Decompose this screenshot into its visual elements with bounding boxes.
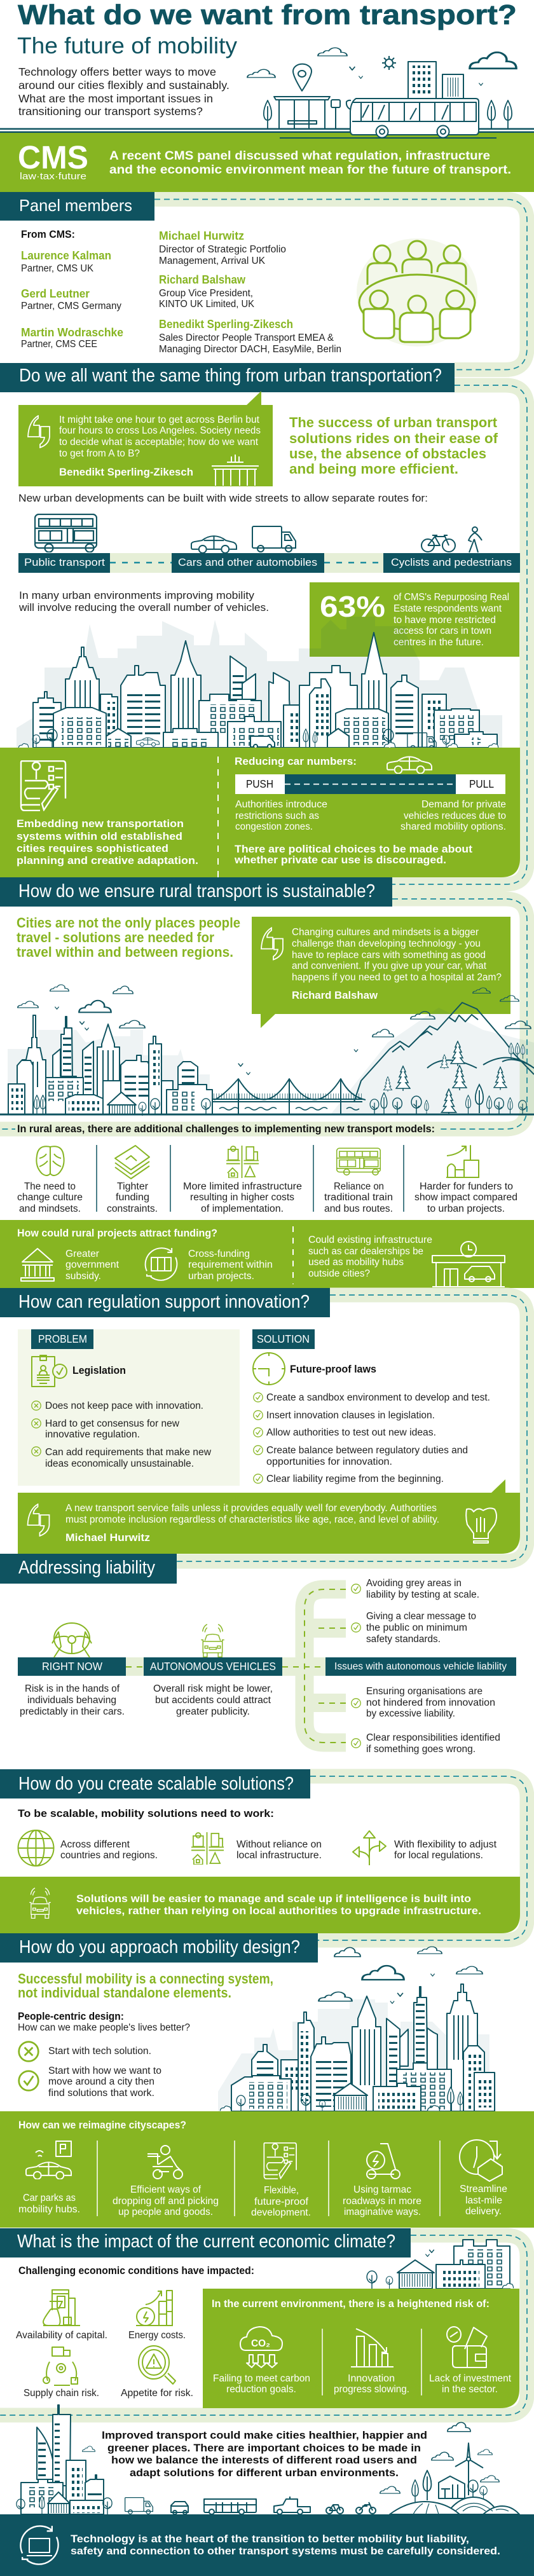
icon: car park bbox=[26, 2141, 71, 2179]
text: embedding transport bbox=[17, 818, 198, 867]
scalable criteria row: countries and regions. bbox=[60, 1850, 158, 1861]
panel: problem bbox=[18, 1329, 240, 1486]
closing message: greener places. There are important choices to be made in bbox=[107, 2442, 421, 2454]
panel: intelligence in vehicles bbox=[0, 1877, 520, 1933]
text: embedding transport: Embedding new transportation bbox=[17, 818, 184, 830]
icon: delivery clock bbox=[460, 2140, 502, 2181]
scalable criteria row bbox=[18, 1830, 497, 1866]
key message: urban solutions: and being more efficient. bbox=[289, 461, 458, 477]
icon: city grid bbox=[226, 1146, 259, 1178]
liability issues list: not hindered from innovation bbox=[366, 1697, 495, 1708]
challenges row: funding bbox=[116, 1192, 149, 1203]
quote: Benedikt Sperling-Zikesch: Benedikt Sperling-Zikesch bbox=[59, 466, 193, 478]
panel list: CMS speakers: Martin Wodraschke bbox=[21, 326, 123, 339]
stat: 63 percent: to have more restricted bbox=[394, 615, 496, 626]
intro paragraph bbox=[18, 65, 229, 118]
icon: CO2 cloud: CO₂ bbox=[251, 2338, 270, 2349]
text: right now: Risk is in the hands of bbox=[25, 1683, 120, 1694]
text: cross-funding: Cross-funding bbox=[188, 1249, 250, 1259]
challenges row: traditional train bbox=[324, 1192, 393, 1203]
CMS logo: law·tax·future bbox=[20, 171, 86, 182]
key message: rural: travel - solutions are needed for bbox=[17, 929, 214, 945]
text: push: congestion zones. bbox=[235, 821, 313, 832]
challenges row: Tighter bbox=[117, 1181, 148, 1192]
key message: urban solutions: solutions rides on their ease of bbox=[289, 430, 498, 446]
text: pull: shared mobility options. bbox=[400, 821, 506, 832]
closing message: Improved transport could make cities healthier, happier and bbox=[102, 2429, 427, 2441]
icon: electric scooter bbox=[367, 2144, 400, 2179]
panel: heightened risk: Innovation bbox=[348, 2373, 395, 2384]
text: pull: Demand for private bbox=[421, 799, 506, 810]
illustration: small city bbox=[367, 2240, 514, 2289]
icon: people round a table bbox=[357, 238, 477, 346]
heading: panel members bbox=[0, 192, 154, 221]
challenges row: of implementation. bbox=[201, 1203, 284, 1214]
icon: bus bbox=[337, 1148, 380, 1175]
text: push bbox=[235, 799, 327, 832]
challenges row: and mindsets. bbox=[19, 1203, 81, 1214]
text: autonomous vehicles: but accidents could attract bbox=[155, 1695, 271, 1706]
liability issues list: Ensuring organisations are bbox=[366, 1686, 483, 1697]
panel: rural funding: How could rural projects attract funding? bbox=[17, 1227, 217, 1239]
panel: reimagine cityscapes: Using tarmac bbox=[353, 2184, 411, 2195]
panel: problem: Does not keep pace with innovation. bbox=[45, 1401, 203, 1411]
quote: Richard Balshaw: Richard Balshaw bbox=[292, 989, 378, 1001]
icon: brain bbox=[36, 1146, 64, 1175]
heading: regulation bbox=[0, 1288, 330, 1317]
footer panel bbox=[0, 2514, 534, 2576]
panel: problem: innovative regulation. bbox=[45, 1429, 140, 1440]
icon: city grid bbox=[191, 1832, 224, 1865]
panel: reimagine cityscapes: development. bbox=[251, 2207, 311, 2218]
panel: reimagine cityscapes: Streamline bbox=[460, 2184, 507, 2195]
text: pull bbox=[400, 799, 506, 832]
heading: urban transportation: Do we all want the same thing from urban transportation? bbox=[19, 366, 442, 386]
subtitle: The future of mobility bbox=[17, 32, 237, 58]
icon: energy costs bbox=[136, 2291, 173, 2326]
panel list: CMS speakers bbox=[21, 228, 123, 350]
icon: falling chart bbox=[351, 2329, 394, 2367]
panel list: guest speakers: Sales Director People Transport EMEA & bbox=[159, 332, 334, 343]
icon: globe bbox=[18, 1830, 53, 1866]
panel: solution: Insert innovation clauses in legislation. bbox=[266, 1410, 435, 1421]
quote: Richard Balshaw: happens if you need to get to a hospital at 2am? bbox=[292, 972, 502, 983]
quote: Richard Balshaw: and convenient. If you give up your car, what bbox=[292, 961, 487, 971]
quote: Benedikt Sperling-Zikesch: to decide what is acceptable; how do we want bbox=[59, 437, 259, 448]
text: people-centric design: move around a city then bbox=[48, 2076, 154, 2087]
panel list: guest speakers: Group Vice President, bbox=[159, 288, 253, 299]
text: right now: individuals behaving bbox=[27, 1695, 116, 1706]
push pull bar bbox=[235, 774, 505, 794]
quote: Michael Hurwitz: Michael Hurwitz bbox=[65, 1531, 150, 1544]
quote: Michael Hurwitz: A new transport service fails unless it provides equally well for everybody. Authorities bbox=[65, 1503, 437, 1514]
economic impact icons: Energy costs. bbox=[128, 2330, 186, 2341]
panel: reimagine cityscapes: roadways in more bbox=[343, 2196, 421, 2207]
icon: diverging arrows bbox=[353, 1831, 386, 1865]
scalable criteria row: local infrastructure. bbox=[236, 1850, 322, 1861]
text: reducing vehicles: In many urban environments improving mobility bbox=[19, 590, 255, 601]
panel: intelligence in vehicles: vehicles, rather than relying on local authorities to upgrade infrastructure. bbox=[76, 1905, 481, 1917]
text: people-centric design bbox=[18, 2010, 190, 2099]
heading: panel members: Panel members bbox=[19, 196, 132, 215]
panel: problem: ideas economically unsustainable. bbox=[45, 1458, 194, 1469]
scalable criteria row: With flexibility to adjust bbox=[394, 1839, 497, 1850]
scalable criteria row: Without reliance on bbox=[236, 1839, 322, 1850]
panel: reimagine cityscapes: Efficient ways of bbox=[130, 2184, 202, 2195]
text: cross-funding bbox=[188, 1249, 273, 1282]
push pull bar: PUSH bbox=[246, 778, 273, 790]
text: subsidy: Greater bbox=[65, 1249, 99, 1259]
icon: cross funding cycle bbox=[146, 1248, 177, 1280]
icon: car with sensors bbox=[201, 1624, 224, 1657]
icon: delivery scooter bbox=[147, 2146, 182, 2179]
panel: solution: Allow authorities to test out new ideas. bbox=[266, 1427, 436, 1438]
panel: rural funding bbox=[0, 1220, 534, 1288]
panel list: CMS speakers: From CMS: bbox=[21, 228, 75, 240]
panel: intelligence in vehicles: Solutions will be easier to manage and scale up if intelligence is built into bbox=[76, 1893, 471, 1905]
diagram: liability routes: AUTONOMOUS VEHICLES bbox=[150, 1660, 276, 1673]
diagram: separate routes: Public transport bbox=[24, 556, 105, 568]
economic impact icons: Supply chain risk. bbox=[24, 2388, 99, 2399]
panel: heightened risk: reduction goals. bbox=[226, 2384, 296, 2395]
panel: solution: Future-proof laws bbox=[290, 1363, 376, 1375]
illustration: city, vehicles and countryside bbox=[17, 2405, 519, 2514]
quote: Benedikt Sperling-Zikesch: four hours to cross Los Angeles. Society needs bbox=[59, 425, 261, 436]
heading: urban transportation bbox=[0, 363, 455, 392]
panel: solution bbox=[252, 1329, 490, 1484]
panel: solution: SOLUTION bbox=[257, 1333, 310, 1345]
heading: addressing liability bbox=[0, 1554, 177, 1584]
panel: problem: Hard to get consensus for new bbox=[45, 1418, 180, 1429]
heading: regulation: How can regulation support innovation? bbox=[18, 1292, 310, 1312]
illustration: city skyline two bbox=[218, 1947, 496, 2111]
title: What do we want from transport? bbox=[18, 0, 517, 31]
text: right now: predictably in their cars. bbox=[20, 1706, 125, 1717]
liability issues list bbox=[352, 1578, 500, 1755]
road: economic climate bbox=[0, 2235, 527, 2415]
panel list: CMS speakers: Gerd Leutner bbox=[21, 287, 90, 300]
text: people-centric design: find solutions that work. bbox=[48, 2088, 154, 2099]
economic impact icons: Availability of capital. bbox=[16, 2330, 107, 2341]
panel: heightened risk bbox=[203, 2289, 519, 2408]
diagram: liability routes: Issues with autonomous vehicle liability bbox=[334, 1661, 507, 1672]
icon: car bbox=[387, 757, 432, 774]
closing message: how we balance the interests of different road users and bbox=[111, 2454, 417, 2466]
text: cross-funding: urban projects. bbox=[188, 1271, 254, 1282]
quote: Benedikt Sperling-Zikesch: It might take one hour to get across Berlin but bbox=[59, 414, 260, 425]
icon: growth chart bbox=[446, 1146, 479, 1177]
text: autonomous vehicles: greater publicity. bbox=[176, 1706, 250, 1717]
text: separate routes: New urban developments can be built with wide streets to allow separate routes for: bbox=[18, 493, 428, 504]
panel list: guest speakers: Management, Arrival UK bbox=[159, 256, 266, 266]
intro banner text bbox=[109, 149, 511, 177]
quote: Michael Hurwitz: must promote inclusion regardless of characteristics like age, race, and level of ability. bbox=[65, 1514, 439, 1525]
icon: car dealership bbox=[432, 1242, 505, 1287]
icon: hands on wheel bbox=[52, 1623, 92, 1657]
panel: problem: PROBLEM bbox=[38, 1333, 87, 1345]
panel: solution: Create balance between regulatory duties and bbox=[266, 1445, 468, 1456]
quote: Richard Balshaw: Changing cultures and mindsets is a bigger bbox=[292, 927, 479, 938]
challenges row: Harder for funders to bbox=[420, 1181, 513, 1192]
key message: urban solutions: The success of urban transport bbox=[289, 414, 498, 430]
closing message: adapt solutions for different urban environments. bbox=[130, 2467, 399, 2479]
panel list: CMS speakers: Partner, CMS CEE bbox=[21, 339, 97, 350]
road: urban transportation bbox=[392, 385, 527, 884]
heading: rural transport: How do we ensure rural transport is sustainable? bbox=[18, 881, 375, 901]
panel: reimagine cityscapes: delivery. bbox=[465, 2206, 502, 2217]
heading: mobility design bbox=[0, 1933, 318, 1963]
panel list: guest speakers: Director of Strategic Portfolio bbox=[159, 244, 286, 255]
icon: money bbox=[115, 1146, 149, 1179]
text: subsidy bbox=[65, 1249, 120, 1282]
panel list: guest speakers: Managing Director DACH, EasyMile, Berlin bbox=[159, 344, 341, 355]
stat: 63 percent: of CMS's Repurposing Real bbox=[394, 592, 509, 603]
liability issues list: Giving a clear message to bbox=[366, 1611, 476, 1622]
text: cross-funding: requirement within bbox=[188, 1259, 273, 1270]
icon: CO2 cloud bbox=[240, 2327, 282, 2367]
key message: urban solutions bbox=[289, 414, 498, 477]
panel: reimagine cityscapes: mobility hubs. bbox=[18, 2204, 80, 2215]
panel list: CMS speakers: Laurence Kalman bbox=[21, 249, 111, 262]
footer text bbox=[71, 2533, 500, 2557]
text: political choices bbox=[234, 843, 472, 866]
quote: Richard Balshaw bbox=[252, 917, 510, 1028]
panel: reimagine cityscapes: dropping off and picking bbox=[113, 2196, 219, 2207]
panel: heightened risk: progress slowing. bbox=[334, 2384, 409, 2395]
icon: supply chain bbox=[43, 2347, 78, 2385]
icon: plan bbox=[264, 2143, 296, 2179]
key message: rural: Cities are not the only places people bbox=[17, 915, 240, 931]
text: embedding transport: cities requires sophisticated bbox=[17, 842, 168, 854]
challenges row: More limited infrastructure bbox=[183, 1181, 302, 1192]
heading: economic climate: What is the impact of the current economic climate? bbox=[17, 2231, 395, 2252]
illustration: city skyline bbox=[17, 617, 502, 750]
challenges row: change culture bbox=[17, 1192, 83, 1203]
heading: addressing liability: Addressing liability bbox=[18, 1558, 155, 1578]
diagram: separate routes bbox=[18, 514, 520, 573]
stat: 63 percent: centres in the future. bbox=[394, 637, 484, 648]
liability issues list: by excessive liability. bbox=[366, 1708, 455, 1719]
text: subsidy: subsidy. bbox=[65, 1271, 101, 1282]
challenges row: resulting in higher costs bbox=[190, 1192, 294, 1203]
icon: legislation bbox=[32, 1355, 67, 1387]
text: people-centric design: Start with tech solution. bbox=[48, 2046, 151, 2057]
panel: heightened risk: Failing to meet carbon bbox=[213, 2373, 310, 2384]
text: mobility hubs: used as mobility hubs bbox=[308, 1257, 404, 1268]
text: mobility hubs: outside cities? bbox=[308, 1268, 370, 1279]
text: subsidy: government bbox=[65, 1259, 120, 1270]
text: political choices: whether private car use is discouraged. bbox=[234, 854, 446, 866]
panel: reimagine cityscapes: up people and goods. bbox=[118, 2207, 213, 2217]
panel list: CMS speakers: Partner, CMS Germany bbox=[21, 301, 121, 312]
text: mobility hubs: Could existing infrastructure bbox=[308, 1235, 432, 1245]
panel list: guest speakers: Richard Balshaw bbox=[159, 273, 246, 286]
panel: reimagine cityscapes bbox=[0, 2111, 534, 2228]
economic impact icons: Appetite for risk. bbox=[121, 2388, 193, 2399]
panel: heightened risk: in the sector. bbox=[442, 2384, 498, 2395]
footer text: safety and connection to other transport systems must be carefully considered. bbox=[71, 2545, 500, 2557]
intro banner text: A recent CMS panel discussed what regulation, infrastructure bbox=[109, 149, 490, 163]
closing message bbox=[102, 2429, 427, 2479]
text: reducing vehicles: will involve reducing the overall number of vehicles. bbox=[18, 602, 269, 613]
text: political choices: There are political choices to be made about bbox=[235, 843, 472, 855]
challenges row: The need to bbox=[24, 1181, 76, 1192]
text: push: Authorities introduce bbox=[235, 799, 327, 810]
intro paragraph: around our cities flexibly and sustainably. bbox=[18, 79, 229, 92]
CMS logo: CMS bbox=[18, 139, 88, 175]
panel: solution: Create a sandbox environment to develop and test. bbox=[266, 1392, 490, 1403]
liability issues list: the public on minimum bbox=[366, 1622, 467, 1633]
stat: 63 percent: Estate respondents want bbox=[394, 603, 502, 614]
challenges row: show impact compared bbox=[414, 1192, 517, 1203]
key message: urban solutions: use, the absence of obstacles bbox=[289, 446, 486, 462]
stat: 63 percent: access for cars in town bbox=[394, 626, 491, 636]
panel: reimagine cityscapes: How can we reimagine cityscapes? bbox=[18, 2119, 186, 2131]
liability issues list: Avoiding grey areas in bbox=[366, 1578, 462, 1589]
key message: rural bbox=[17, 915, 240, 960]
intro paragraph: Technology offers better ways to move bbox=[18, 65, 216, 78]
heading: mobility design: How do you approach mobility design? bbox=[19, 1937, 300, 1957]
icon: laptop cycle bbox=[20, 2526, 58, 2565]
road: rural transport bbox=[0, 899, 527, 1135]
panel list: guest speakers: Benedikt Sperling-Zikesch bbox=[159, 318, 293, 331]
heading: scalable solutions bbox=[0, 1769, 310, 1798]
quote: Benedikt Sperling-Zikesch bbox=[18, 391, 273, 486]
key message: connecting system: not individual standalone elements. bbox=[18, 1985, 231, 2001]
text: people-centric design: Start with how we want to bbox=[48, 2066, 161, 2076]
challenges row: to urban projects. bbox=[427, 1203, 505, 1214]
illustration: bus stop scene bbox=[0, 48, 534, 192]
intro paragraph: What are the most important issues in bbox=[18, 92, 213, 105]
text: scalable intro: To be scalable, mobility solutions need to work: bbox=[18, 1807, 274, 1819]
panel list: guest speakers bbox=[159, 230, 341, 355]
quote: Richard Balshaw: challenge than developing technology - you bbox=[292, 938, 481, 949]
key message: connecting system: Successful mobility is a connecting system, bbox=[18, 1971, 273, 1987]
diagram: separate routes: Cyclists and pedestrians bbox=[391, 556, 512, 568]
challenges row: and bus routes. bbox=[324, 1203, 393, 1214]
panel: heightened risk: Lack of investment bbox=[429, 2373, 512, 2384]
text: people-centric design: How can we make people's lives better? bbox=[18, 2022, 190, 2033]
economic impact icons bbox=[16, 2290, 193, 2399]
diagram: liability routes bbox=[18, 1578, 516, 1755]
text: people-centric design: People-centric design: bbox=[18, 2010, 124, 2022]
text: embedding transport: systems within old established bbox=[17, 830, 182, 842]
panel: reimagine cityscapes: Car parks as bbox=[23, 2193, 76, 2203]
intro banner text: and the economic environment mean for the future of transport. bbox=[109, 163, 511, 177]
icon: route plan bbox=[21, 761, 65, 811]
challenges row bbox=[17, 1145, 517, 1214]
diagram: separate routes: Cars and other automobiles bbox=[178, 556, 317, 568]
panel list: CMS speakers: Partner, CMS UK bbox=[21, 263, 94, 274]
text: push: restrictions such as bbox=[235, 811, 319, 821]
road: scalable solutions bbox=[310, 1776, 527, 1940]
road: regulation bbox=[177, 1295, 527, 1561]
panel: problem: Legislation bbox=[72, 1364, 126, 1376]
diagram: liability routes: RIGHT NOW bbox=[42, 1660, 102, 1673]
panel: reimagine cityscapes: Flexible, bbox=[264, 2185, 299, 2196]
text: reducing vehicles bbox=[18, 590, 269, 613]
text: reducing car numbers: Reducing car numbers: bbox=[235, 755, 357, 767]
heading: scalable solutions: How do you create scalable solutions? bbox=[18, 1774, 294, 1794]
stat: 63 percent bbox=[310, 582, 519, 657]
panel list: guest speakers: Michael Hurwitz bbox=[159, 230, 244, 242]
text: pull: vehicles reduces due to bbox=[404, 811, 506, 821]
push pull bar: PULL bbox=[469, 778, 494, 790]
text: right now bbox=[20, 1683, 125, 1717]
road: panel members bbox=[154, 200, 527, 370]
text: mobility hubs: such as car dealerships be bbox=[308, 1246, 423, 1257]
panel: problem: Can add requirements that make new bbox=[45, 1447, 212, 1458]
key message: rural: travel within and between regions. bbox=[17, 944, 233, 960]
text: embedding transport: planning and creative adaptation. bbox=[17, 854, 198, 867]
liability issues list: liability by testing at scale. bbox=[366, 1589, 479, 1600]
panel: solution: opportunities for innovation. bbox=[266, 1456, 392, 1467]
panel: reimagine cityscapes: future-proof bbox=[254, 2196, 309, 2207]
key message: connecting system bbox=[18, 1971, 273, 2001]
challenges row: Reliance on bbox=[334, 1181, 384, 1192]
text: autonomous vehicles bbox=[153, 1683, 273, 1717]
quote: Richard Balshaw: have to replace cars with something as good bbox=[292, 950, 486, 961]
icon: availability of capital bbox=[43, 2290, 80, 2326]
text: rural challenges: In rural areas, there are additional challenges to implementing new transport models: bbox=[17, 1123, 435, 1135]
panel: solution: Clear liability regime from the beginning. bbox=[266, 1474, 444, 1484]
panel: heightened risk: In the current environment, there is a heightened risk of: bbox=[212, 2298, 489, 2310]
scalable criteria row: for local regulations. bbox=[394, 1850, 483, 1861]
quote: Benedikt Sperling-Zikesch: to get from A to B? bbox=[59, 448, 140, 459]
panel: reimagine cityscapes: last-mile bbox=[465, 2195, 502, 2206]
text: economic conditions: Challenging economic conditions have impacted: bbox=[18, 2264, 254, 2277]
liability issues list: Clear responsibilities identified bbox=[366, 1732, 500, 1743]
heading: economic climate bbox=[0, 2228, 411, 2257]
icon: magnifier warning bbox=[139, 2346, 175, 2384]
panel: embedding and reducing car numbers bbox=[0, 748, 520, 877]
text: autonomous vehicles: Overall risk might be lower, bbox=[153, 1683, 273, 1694]
panel: reimagine cityscapes: imaginative ways. bbox=[344, 2207, 421, 2217]
footer text: Technology is at the heart of the transition to better mobility but liability, bbox=[71, 2533, 469, 2545]
intro paragraph: transitioning our transport systems? bbox=[18, 105, 203, 118]
liability issues list: safety standards. bbox=[366, 1634, 441, 1645]
scalable criteria row: Across different bbox=[60, 1839, 130, 1850]
stat: 63 percent: 63% bbox=[320, 590, 385, 623]
liability issues list: if something goes wrong. bbox=[366, 1744, 476, 1755]
heading: rural transport bbox=[0, 877, 392, 907]
icon: government building bbox=[21, 1249, 54, 1281]
icon: wallet bbox=[447, 2327, 487, 2367]
icon: clock bbox=[253, 1353, 285, 1385]
challenges row: constraints. bbox=[107, 1203, 158, 1214]
illustration: city, bridge and mountains bbox=[0, 985, 534, 1116]
quote: Michael Hurwitz bbox=[18, 1479, 520, 1554]
panel list: guest speakers: KINTO UK Limited, UK bbox=[159, 299, 255, 310]
text: mobility hubs bbox=[308, 1235, 432, 1279]
